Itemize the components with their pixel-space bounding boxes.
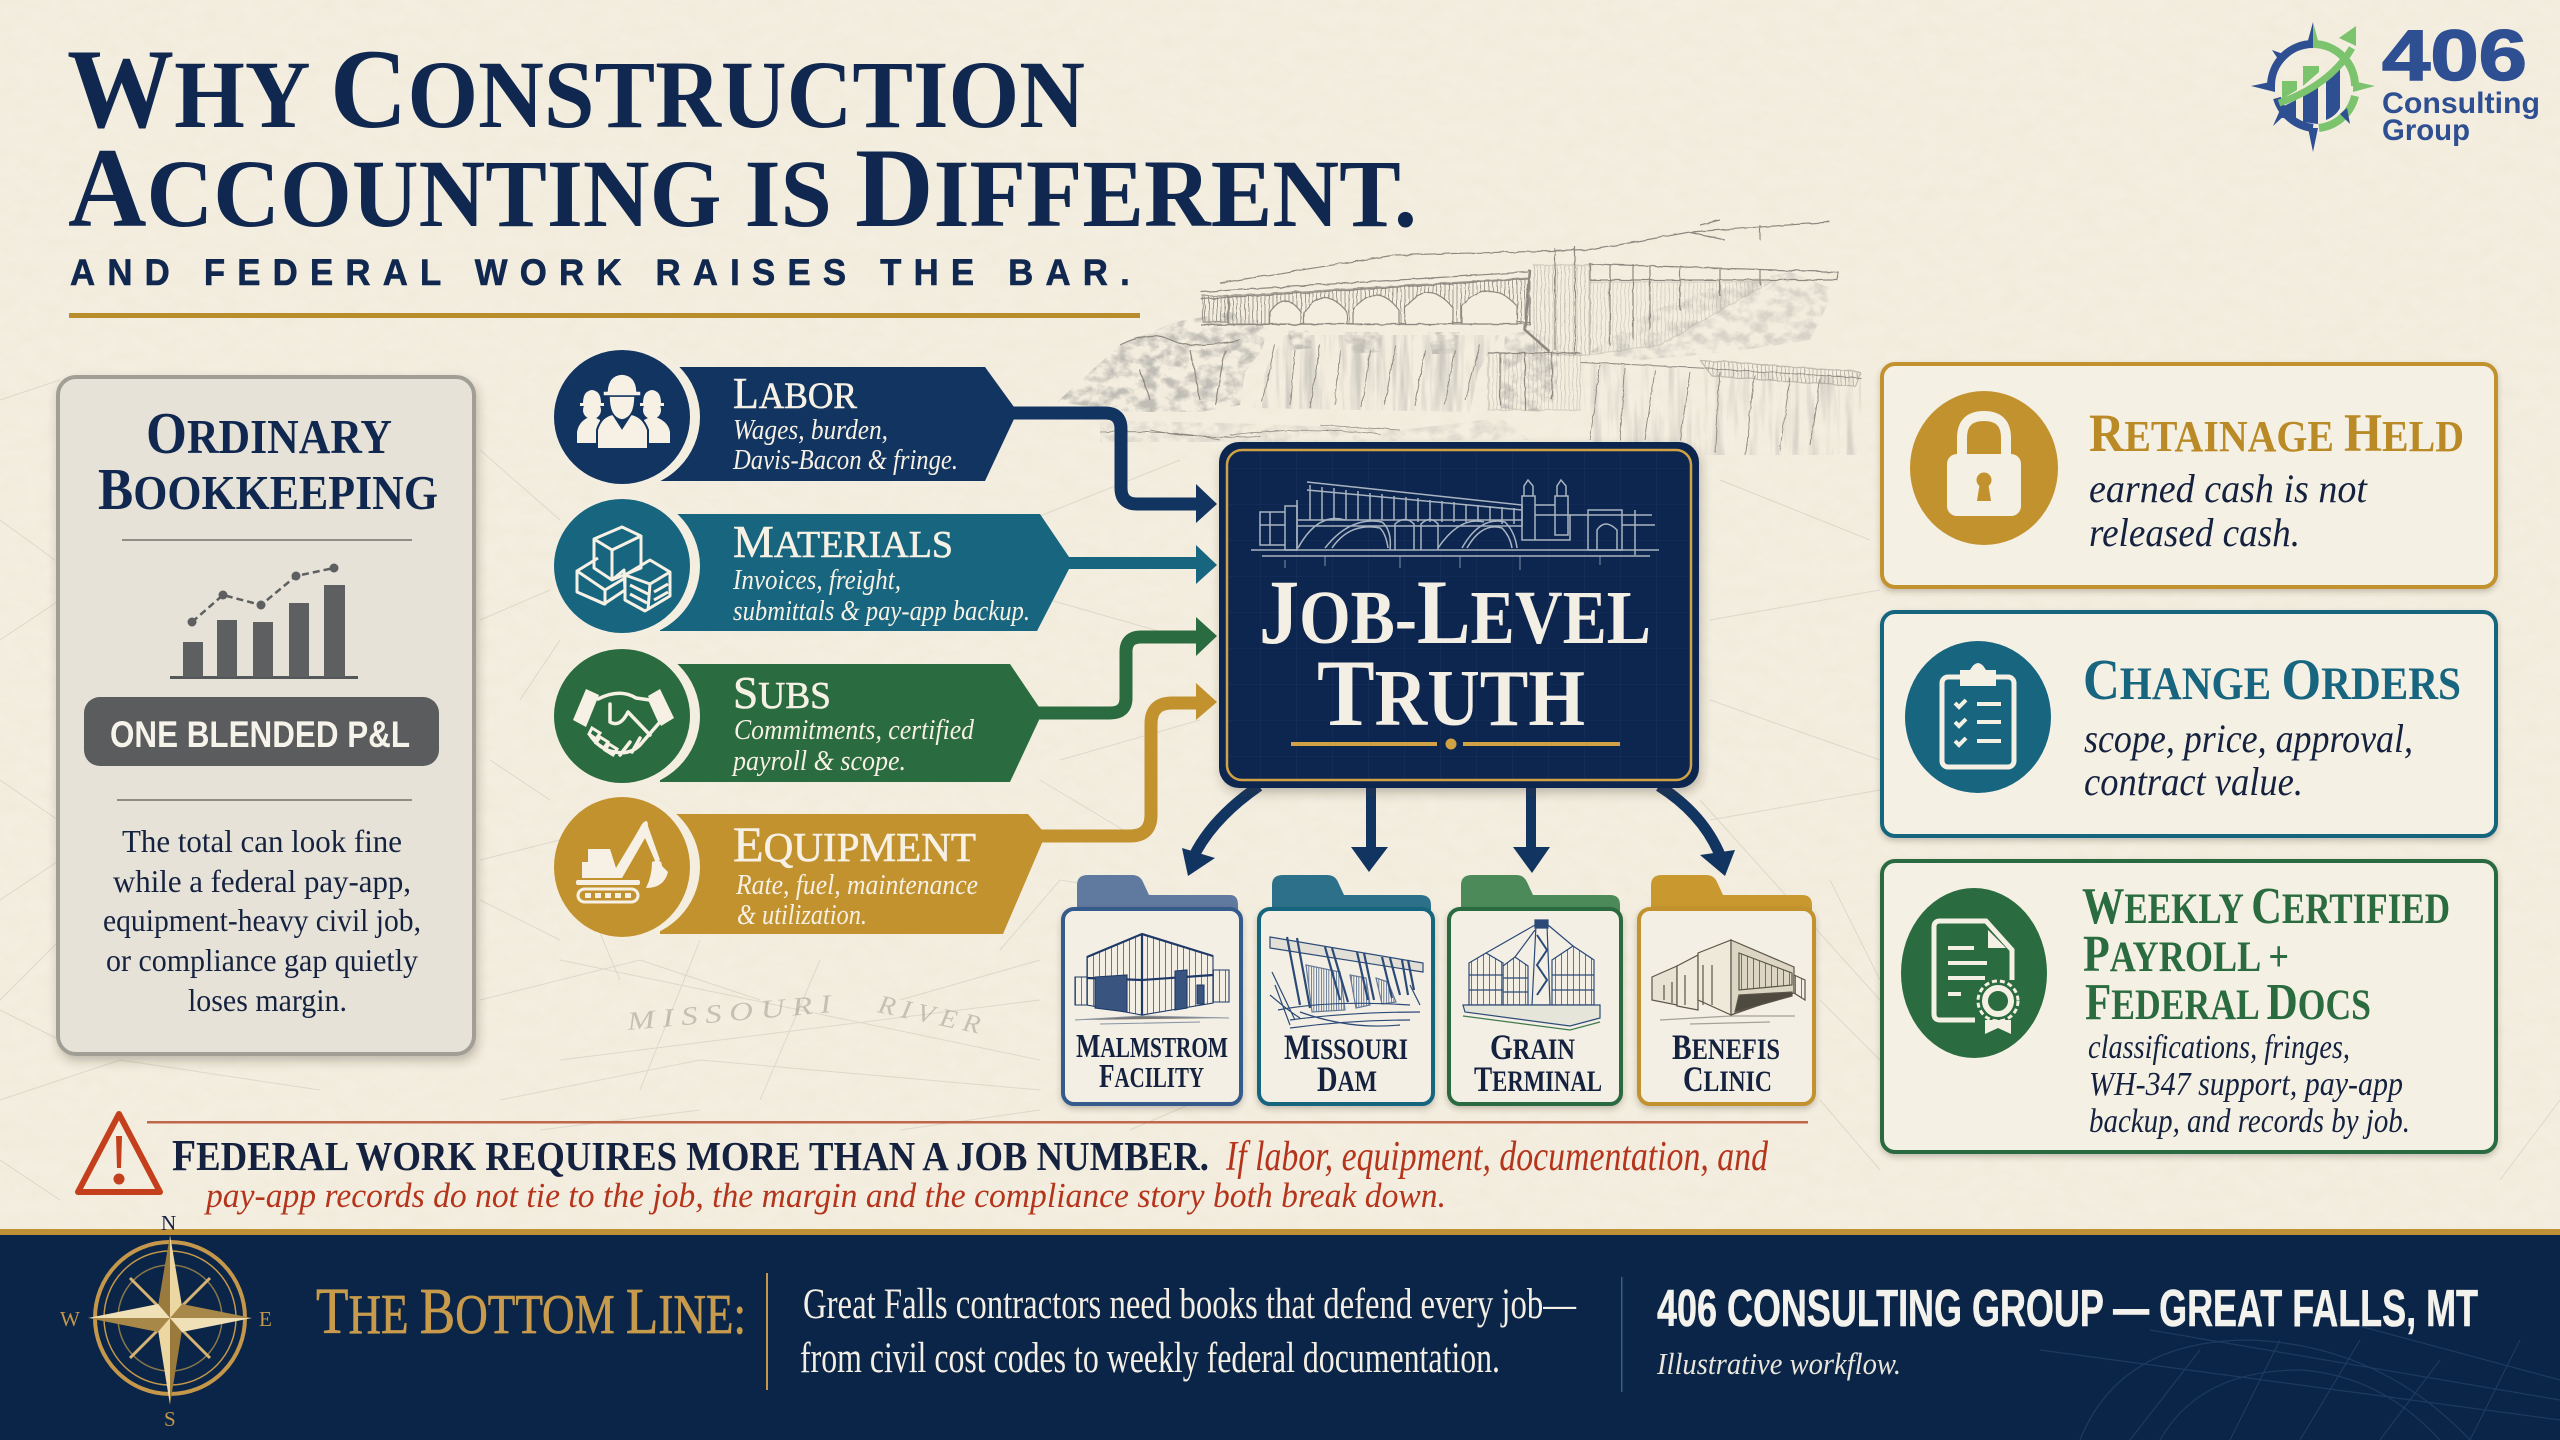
text: equipment: & utilization. (737, 899, 867, 931)
heading: the bottom line: THE BOTTOM LINE: (316, 1275, 746, 1348)
icon: compass rose (60, 1211, 272, 1431)
background: faint survey map lines (0, 380, 2560, 1200)
arrows: job-level truth to folders (1182, 785, 1735, 876)
label: FACILITY (1099, 1058, 1204, 1095)
logo wordmark: Consulting (2382, 87, 2540, 120)
text: CHANGE ORDERS (2083, 647, 2461, 712)
text: scope, price, approval, (2084, 716, 2413, 761)
company credit: Illustrative workflow. (1656, 1346, 1901, 1381)
illustration: clinic building (1652, 940, 1805, 1024)
heading: ordinary bookkeeping: ORDINARY (146, 400, 392, 466)
heading: job-level truth: JOB-LEVEL (1259, 561, 1651, 663)
rock and water tone (1057, 272, 1861, 455)
footer blueprint sketch (2040, 1310, 2560, 1440)
heading: ordinary bookkeeping: BOOKKEEPING (98, 456, 438, 522)
label (1474, 1027, 1602, 1099)
text: equipment (733, 816, 978, 931)
warning text: If labor, equipment, documentation, and (1225, 1134, 1769, 1180)
icon: compass rose: W (60, 1307, 80, 1331)
panel: Grain Terminal folder (1449, 875, 1621, 1104)
warning text: pay-app records do not tie to the job, the margin and the compliance story both break down. (203, 1176, 1446, 1215)
icon: compass rose: S (164, 1407, 176, 1431)
icon: document with seal (1934, 921, 2018, 1034)
bottom line message: from civil cost codes to weekly federal documentation. (800, 1335, 1500, 1382)
panel: change orders (1882, 612, 2496, 836)
illustration: industrial building (1075, 934, 1229, 1024)
text: labor (732, 369, 958, 476)
warning text (172, 1131, 1769, 1215)
icon: excavator (576, 821, 668, 902)
logo wordmark (2382, 17, 2540, 147)
logo: 406 Consulting Group (2251, 17, 2540, 152)
icon: blended bar chart (170, 564, 358, 679)
text (2083, 647, 2461, 804)
text: contract value. (2084, 759, 2303, 804)
text (2089, 403, 2464, 555)
arrow: subs connector (1035, 617, 1217, 713)
text: released cash. (2089, 510, 2300, 555)
label (1284, 1027, 1408, 1099)
text: equipment: EQUIPMENT (733, 816, 976, 872)
bottom line message (800, 1281, 1577, 1382)
icon: warning triangle (78, 1114, 160, 1192)
panel: retainage held (1882, 364, 2496, 587)
background: Missouri River map label: MISSOURI (625, 989, 840, 1036)
logo wordmark: 406 (2382, 17, 2527, 96)
text: classifications, fringes, (2088, 1029, 2350, 1066)
label: DAM (1317, 1059, 1377, 1099)
icon: padlock (1947, 416, 2021, 516)
icon: compass rose: N (161, 1211, 176, 1235)
footer band (0, 1211, 2560, 1440)
illustration: grain silos (1463, 920, 1600, 1030)
illustration: blueprint bridge (1251, 480, 1659, 570)
text: labor: LABOR (733, 369, 857, 418)
body text: The total can look fine (122, 823, 402, 859)
text: subs: SUBS (733, 667, 831, 718)
body text: loses margin. (188, 982, 347, 1018)
text: FEDERAL DOCS (2085, 974, 2371, 1031)
text: PAYROLL + (2083, 926, 2289, 983)
panel: Benefis Clinic folder (1639, 875, 1814, 1104)
text (2082, 878, 2450, 1140)
background: Great Falls dam and waterfall sketch (1057, 220, 1861, 455)
panel: weekly certified payroll and federal docs (1882, 861, 2496, 1152)
label: BENEFIS (1672, 1027, 1780, 1067)
icon: compass rose: E (259, 1307, 272, 1331)
label: CLINIC (1683, 1059, 1772, 1099)
warning text: FEDERAL WORK REQUIRES MORE THAN A JOB NUMBER. (172, 1131, 1209, 1180)
subtitle: AND FEDERAL WORK RAISES THE BAR. (70, 252, 1142, 293)
text: WEEKLY CERTIFIED (2082, 878, 2450, 935)
arrow: materials connector (1060, 545, 1217, 584)
text: labor: Wages, burden, (733, 414, 888, 446)
icon: compass logo mark (2251, 22, 2375, 152)
heading: job-level truth: TRUTH (1317, 640, 1585, 746)
label: one blended P&L (84, 697, 439, 766)
text: materials: Invoices, freight, (732, 564, 901, 596)
label: MISSOURI (1284, 1027, 1408, 1067)
text: earned cash is not (2089, 466, 2368, 511)
body text: equipment-heavy civil job, (103, 902, 421, 938)
text: equipment: Rate, fuel, maintenance (735, 869, 978, 901)
panel: Malmstrom Facility folder (1063, 875, 1241, 1104)
icon: clipboard checklist (1942, 663, 2014, 767)
background: Missouri River map label (625, 989, 989, 1041)
logo wordmark: Group (2382, 114, 2470, 147)
label: MALMSTROM (1076, 1028, 1228, 1065)
text: subs (731, 667, 974, 777)
title (67, 27, 1417, 251)
heading: ordinary bookkeeping (98, 400, 438, 522)
panel: ordinary bookkeeping (58, 377, 474, 1054)
body text: or compliance gap quietly (106, 942, 418, 978)
body text: while a federal pay-app, (113, 863, 411, 899)
text: subs: payroll & scope. (731, 745, 906, 777)
icon: construction crew (577, 374, 670, 449)
text: RETAINAGE HELD (2089, 403, 2464, 463)
label (1672, 1027, 1780, 1099)
arrow: labor connector (1010, 413, 1217, 523)
text: materials (732, 516, 1030, 627)
label: TERMINAL (1474, 1059, 1602, 1099)
label (1076, 1028, 1228, 1095)
bottom line message: Great Falls contractors need books that defend every job— (803, 1281, 1577, 1328)
text: WH-347 support, pay-app (2089, 1066, 2403, 1103)
title: WHY CONSTRUCTION (67, 27, 1085, 152)
company credit (1656, 1280, 2478, 1381)
background: Missouri River map label: RIVER (875, 989, 989, 1041)
arrow: equipment connector (1035, 683, 1217, 836)
illustration: dam spillway (1270, 937, 1423, 1028)
panel: subs input (554, 644, 1039, 788)
bridge linework (1100, 220, 1861, 455)
text: materials: MATERIALS (733, 516, 953, 567)
panel: equipment input (554, 795, 1042, 939)
icon: handshake (573, 689, 674, 755)
label: one blended P&L: ONE BLENDED P&L (110, 714, 410, 755)
panel: materials input (554, 494, 1069, 638)
icon: stacked boxes (577, 527, 670, 611)
title: ACCOUNTING IS DIFFERENT. (68, 126, 1417, 251)
panel: labor input (554, 345, 1014, 489)
panel: Missouri Dam folder (1259, 875, 1433, 1104)
text: subs: Commitments, certified (734, 714, 974, 746)
text: materials: submittals & pay-app backup. (733, 595, 1030, 627)
text: backup, and records by job. (2089, 1103, 2410, 1140)
text: labor: Davis-Bacon & fringe. (732, 444, 958, 476)
panel: job-level truth (1219, 442, 1699, 788)
heading: job-level truth (1259, 561, 1651, 746)
gold title rule (69, 313, 1140, 318)
label: GRAIN (1490, 1027, 1575, 1067)
callout: federal work warning (78, 1114, 1808, 1215)
body text (103, 823, 421, 1018)
